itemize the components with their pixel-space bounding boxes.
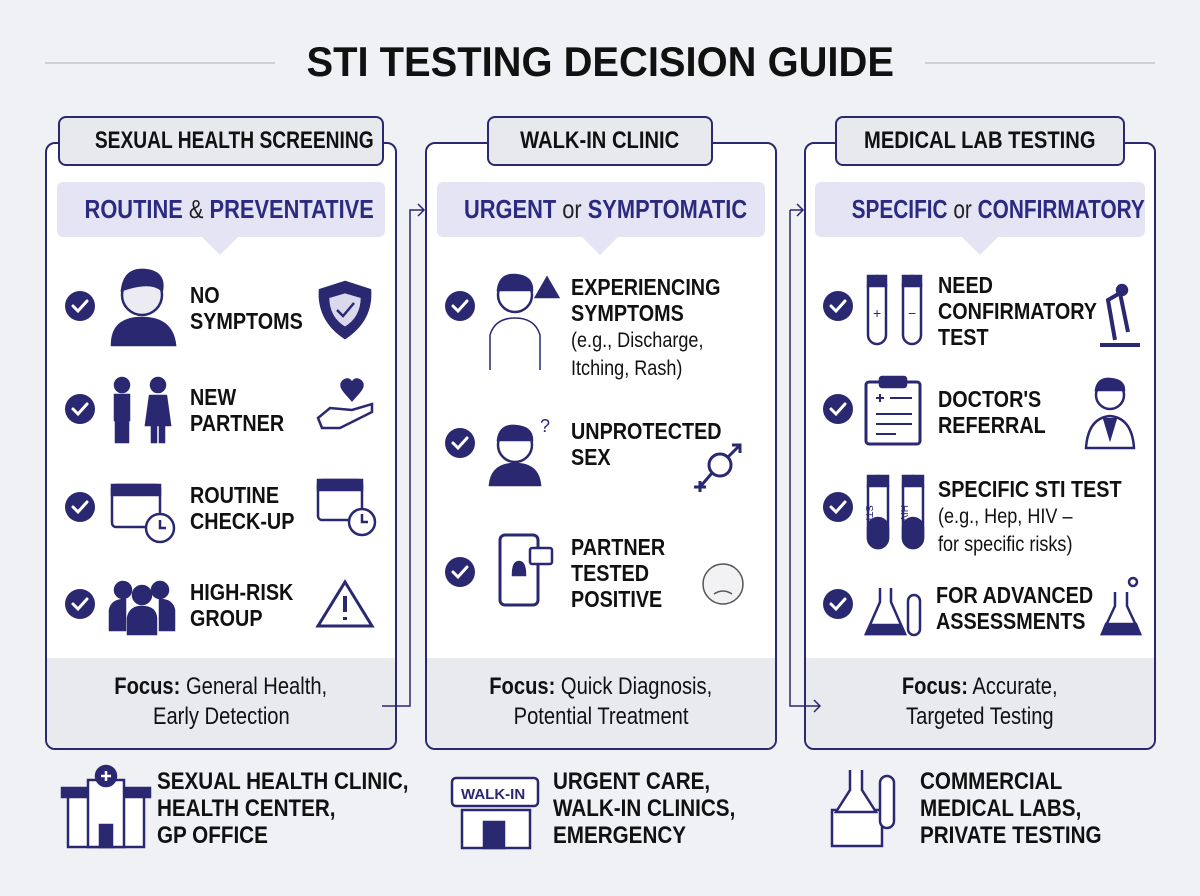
text: ROUTINE	[190, 482, 279, 508]
text: PARTNER	[571, 534, 665, 560]
tab heading col3: MEDICAL LAB TESTING	[864, 127, 1096, 154]
focus: accurate testing	[806, 658, 1154, 748]
panel: walk-in clinic	[425, 142, 777, 750]
text: POSITIVE	[571, 586, 662, 612]
tab heading col3	[835, 116, 1125, 166]
subheader col3	[815, 182, 1145, 237]
panel: medical lab testing	[804, 142, 1156, 750]
item labels col1: SYMPTOMS	[190, 308, 303, 334]
panel: sexual health screening	[45, 142, 397, 750]
bottom location labels: SEXUAL HEALTH CLINIC,	[157, 768, 409, 795]
text: SPECIFIC STI TEST	[938, 476, 1122, 502]
item labels col3: NEED	[938, 272, 993, 298]
subheader col2: URGENT or SYMPTOMATIC	[464, 194, 747, 224]
item labels col2	[571, 274, 720, 380]
focus: accurate testing: Focus: Accurate,	[902, 673, 1058, 700]
text: REFERRAL	[938, 412, 1046, 438]
bottom location labels: GP OFFICE	[157, 822, 268, 849]
text: CHECK-UP	[190, 508, 294, 534]
subheader col1	[57, 182, 385, 237]
text: FOR ADVANCED	[936, 582, 1093, 608]
checklist icons and items: +	[873, 305, 881, 321]
subheader col2	[437, 182, 765, 237]
tab heading col2: WALK-IN CLINIC	[520, 127, 680, 154]
text: TESTED	[571, 560, 649, 586]
checklist icons and items: HIV	[898, 505, 909, 522]
tab heading col2	[487, 116, 713, 166]
text: HIGH-RISK	[190, 579, 293, 605]
item labels col3	[938, 272, 1097, 350]
text: NEW	[190, 384, 236, 410]
item labels col2: Itching, Rash)	[571, 357, 682, 380]
text: EMERGENCY	[553, 822, 686, 849]
item labels col1: NO	[190, 282, 220, 308]
focus: quick diagnosis: Focus: Quick Diagnosis,	[490, 673, 712, 700]
tab heading col1: SEXUAL HEALTH SCREENING	[95, 127, 374, 154]
focus: general health: Early Detection	[153, 703, 289, 730]
tab heading col1	[58, 116, 384, 166]
text: PARTNER	[190, 410, 284, 436]
item labels col1	[190, 282, 303, 334]
bottom location labels	[157, 768, 409, 849]
item labels col2: SYMPTOMS	[571, 300, 684, 326]
text: ASSESSMENTS	[936, 608, 1085, 634]
item labels col2: EXPERIENCING	[571, 274, 720, 300]
focus: general health	[47, 658, 395, 748]
text: GROUP	[190, 605, 263, 631]
text: UNPROTECTED	[571, 418, 722, 444]
focus: quick diagnosis: Potential Treatment	[514, 703, 688, 730]
focus: accurate testing: Targeted Testing	[906, 703, 1054, 730]
text: PRIVATE TESTING	[920, 822, 1102, 849]
focus: quick diagnosis	[427, 658, 775, 748]
item labels col3: TEST	[938, 324, 989, 350]
checklist icons and items: −	[908, 305, 916, 321]
subheader col3: SPECIFIC or CONFIRMATORY	[852, 194, 1145, 224]
item labels col2: (e.g., Discharge,	[571, 329, 704, 352]
focus: general health: Focus: General Health,	[115, 673, 327, 700]
text: (e.g., Hep, HIV –	[938, 505, 1073, 528]
text: COMMERCIAL	[920, 768, 1062, 795]
checklist icons and items: ?	[540, 416, 550, 436]
checklist icons and items: WALK-IN	[461, 786, 525, 803]
item labels col3: CONFIRMATORY	[938, 298, 1097, 324]
bottom location labels: HEALTH CENTER,	[157, 795, 336, 822]
title: STI TESTING DECISION GUIDE	[306, 38, 894, 85]
subheader col1: ROUTINE & PREVENTATIVE	[85, 194, 374, 224]
text: URGENT CARE,	[553, 768, 710, 795]
text: WALK-IN CLINICS,	[553, 795, 735, 822]
checklist icons and items: STI	[863, 505, 874, 521]
text: MEDICAL LABS,	[920, 795, 1081, 822]
text: for specific risks)	[938, 533, 1072, 556]
text: DOCTOR'S	[938, 386, 1041, 412]
text: SEX	[571, 444, 611, 470]
